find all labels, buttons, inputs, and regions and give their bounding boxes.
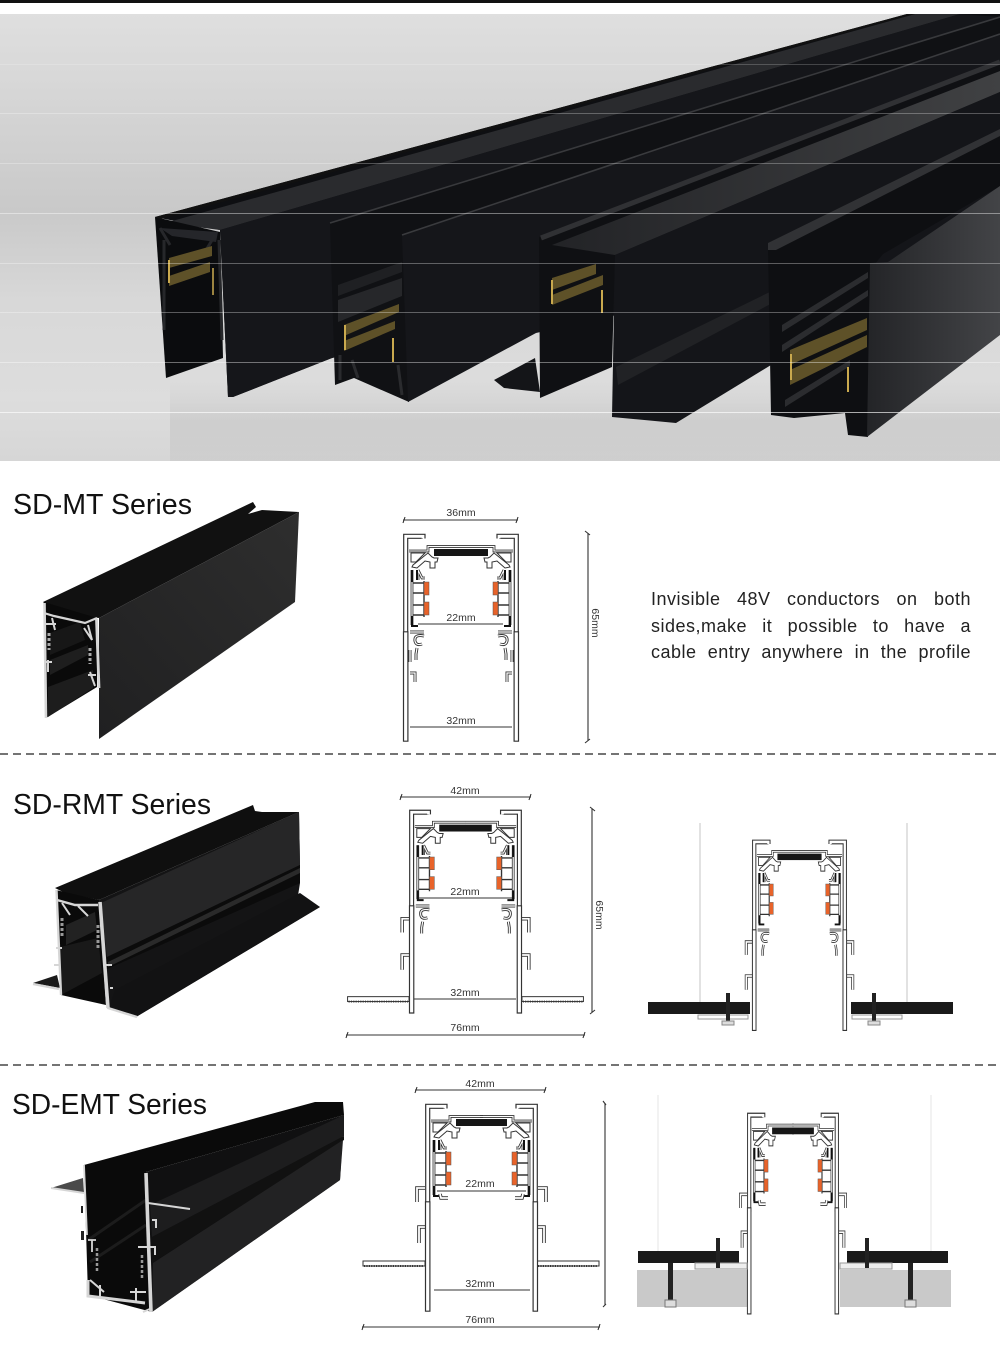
section drawing: SD-EMT: 32mm xyxy=(465,1278,495,1290)
section drawing: SD-MT: 22mm xyxy=(446,612,476,624)
top rule xyxy=(0,0,1000,3)
product photo: SD-MT xyxy=(43,502,299,739)
description text block: cable entry anywhere in the profile xyxy=(651,642,971,662)
description text block xyxy=(651,589,971,662)
divider 1 xyxy=(0,753,1000,755)
section drawing: SD-EMT: 42mm xyxy=(465,1078,495,1090)
divider 2 xyxy=(0,1064,1000,1066)
profile 1 xyxy=(155,14,1000,397)
section drawing: SD-RMT: 42mm xyxy=(450,785,480,797)
profile 3 xyxy=(494,62,1000,423)
description text block: Invisible 48V conductors on both xyxy=(651,589,971,609)
heading: SD-RMT Series: SD-RMT Series xyxy=(13,789,211,821)
product photo: SD-RMT xyxy=(33,805,320,1017)
section drawing: SD-MT: 65mm xyxy=(589,608,601,638)
section drawing: SD-RMT xyxy=(346,785,605,1038)
section drawing: SD-EMT xyxy=(362,1078,606,1330)
product photo: SD-EMT xyxy=(51,1102,344,1312)
heading: SD-EMT Series: SD-EMT Series xyxy=(12,1089,207,1121)
section drawing: SD-RMT: 22mm xyxy=(450,886,480,898)
description text block: sides,make it possible to have a xyxy=(651,616,971,636)
section drawing: SD-MT xyxy=(403,507,601,743)
installation drawing: SD-EMT xyxy=(637,1095,951,1312)
section drawing: SD-RMT: 76mm xyxy=(450,1022,480,1034)
heading: SD-MT Series: SD-MT Series xyxy=(13,489,192,521)
section drawing: SD-RMT: 65mm xyxy=(593,900,605,930)
profile 4 xyxy=(768,129,1000,437)
section drawing: SD-RMT: 32mm xyxy=(450,987,480,999)
installation drawing: SD-RMT xyxy=(648,823,953,1028)
hero photo: four track profiles xyxy=(0,14,1000,461)
section drawing: SD-MT: 32mm xyxy=(446,715,476,727)
section drawing: SD-EMT: 22mm xyxy=(465,1178,495,1190)
section drawing: SD-MT: 36mm xyxy=(446,507,476,519)
profile 2 xyxy=(330,17,1000,402)
section drawing: SD-EMT: 76mm xyxy=(465,1314,495,1326)
hero horizontal lines xyxy=(0,64,1000,412)
